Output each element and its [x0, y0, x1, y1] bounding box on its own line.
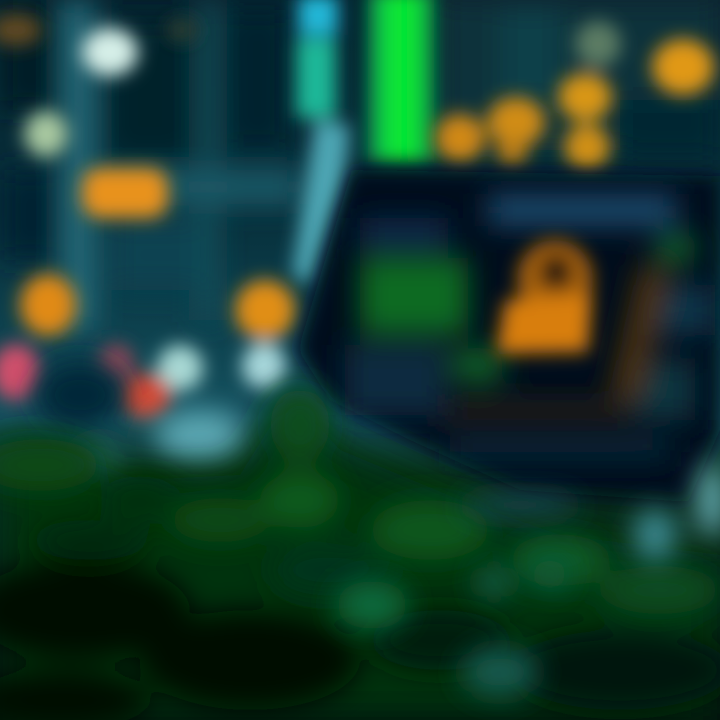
light: orange upper	[558, 73, 612, 121]
green button	[450, 347, 506, 383]
light: orange top right	[652, 39, 714, 95]
small heading	[360, 218, 448, 250]
green beam	[368, 0, 434, 162]
tablet screen contents	[345, 194, 715, 458]
lower left block	[345, 345, 445, 415]
light: orange center	[235, 280, 295, 340]
bottom lines	[445, 402, 635, 420]
orange and white lights	[0, 14, 714, 418]
tablet body	[298, 170, 720, 502]
cyan beam	[292, 0, 350, 285]
city building structure	[0, 0, 720, 330]
light: pink small	[98, 344, 134, 380]
tablet	[298, 170, 720, 502]
light: pink left	[0, 344, 40, 400]
light: white top left	[82, 28, 138, 76]
light: white small	[157, 345, 203, 391]
foliage mottling	[0, 389, 720, 720]
right column	[655, 285, 715, 335]
header bar	[488, 194, 676, 226]
light: pale green	[24, 111, 68, 157]
light: orange left	[20, 274, 76, 336]
light: pale top	[575, 21, 621, 67]
green panel	[360, 258, 468, 334]
light: white center	[242, 343, 286, 389]
light: orange banner	[82, 168, 168, 218]
foliage highlights	[336, 462, 720, 696]
foliage	[0, 395, 720, 720]
light: red	[120, 374, 172, 418]
light beams	[292, 0, 434, 285]
street shapes	[35, 361, 246, 485]
icon: orange padlock	[496, 240, 593, 354]
